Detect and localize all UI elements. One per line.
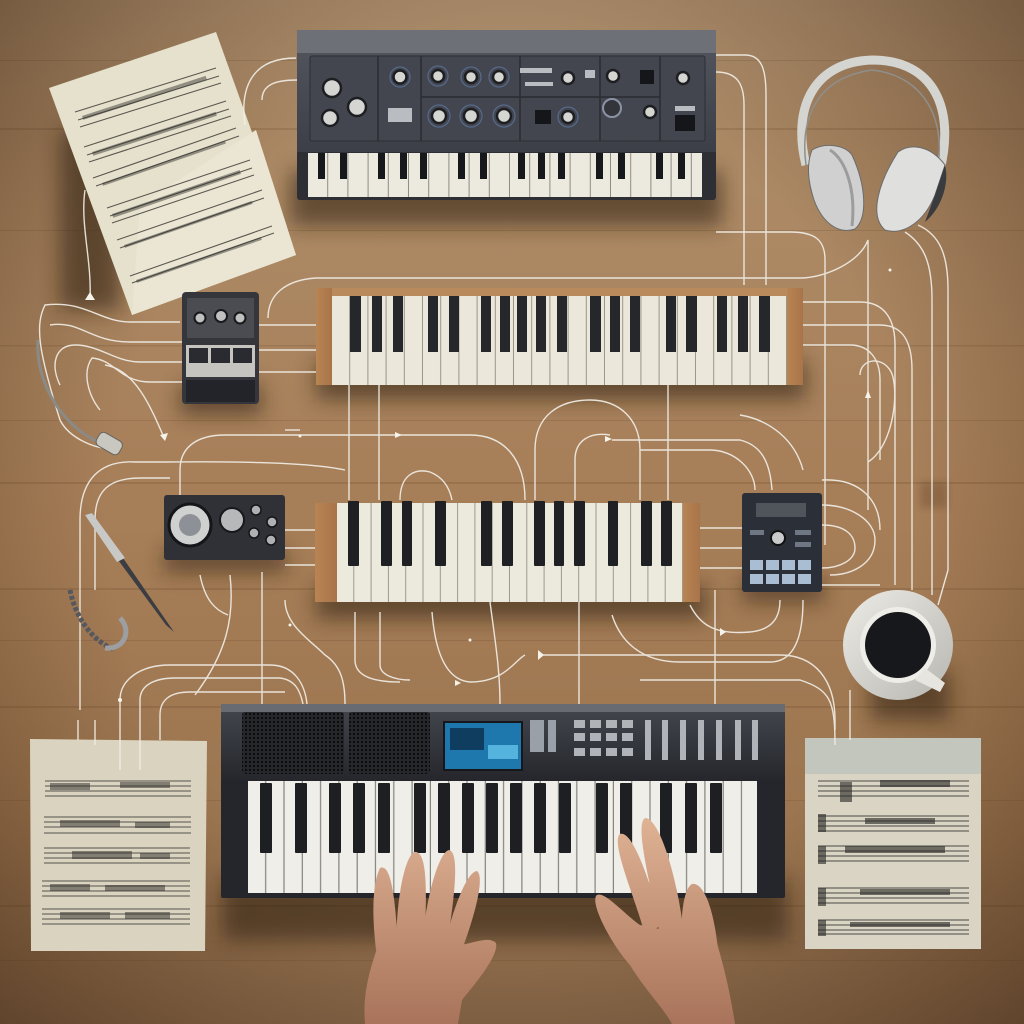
keyboard 2: wooden cheeks (316, 288, 803, 385)
workstation keys (248, 781, 757, 893)
white signal wires (40, 55, 948, 770)
headphones (802, 60, 946, 231)
keyboard 4: main workstation (221, 704, 785, 898)
right hand (595, 818, 735, 1024)
synth keys (308, 153, 702, 197)
coffee cup (843, 590, 953, 700)
coiled clip (70, 590, 126, 650)
drum pad controller (742, 493, 822, 592)
pen (85, 513, 174, 632)
left hand (364, 850, 496, 1024)
keyboard 1: top synth (297, 30, 716, 200)
drop shadows under objects (60, 130, 950, 940)
sheet music: top left (49, 32, 296, 315)
sheet music: bottom left (30, 739, 207, 951)
speaker grilles (242, 712, 344, 774)
cable and plug (38, 340, 124, 457)
keyboard 3: wooden cheeks (315, 501, 700, 602)
display screen (444, 722, 522, 770)
wire arrowheads and nodes (85, 268, 892, 702)
audio interface (164, 495, 285, 560)
synth control panel (297, 30, 716, 152)
workstation control panel (221, 704, 785, 780)
sheet music: bottom right (805, 738, 981, 949)
effects pedal (182, 292, 259, 404)
